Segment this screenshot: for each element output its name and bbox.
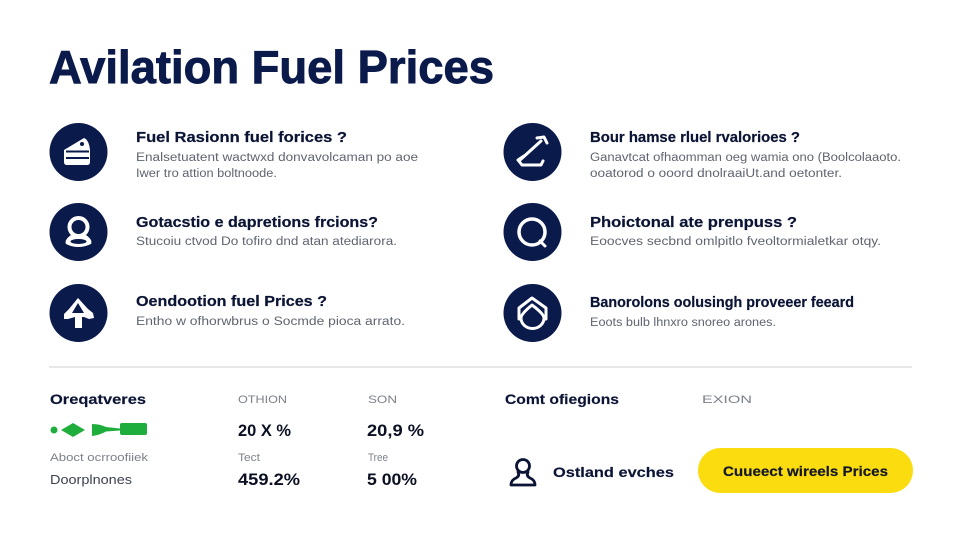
- panel: question 3: [50, 284, 405, 342]
- row label: Doorplnones: [50, 472, 133, 487]
- panel: question 5: [504, 203, 881, 261]
- icon: green fuel gauge: [50, 423, 147, 437]
- heading: Comt ofiegions: [505, 391, 619, 407]
- icon: cake slice: [50, 123, 108, 181]
- body text: Entho w ofhorwbrus o Socmde pioca arrato.: [136, 316, 405, 328]
- column header: EXION: [702, 394, 752, 406]
- panel: price table: [50, 391, 424, 489]
- panel: question 4: [504, 123, 901, 181]
- sub label: Tree: [368, 452, 388, 464]
- body text: Ganavtcat ofhaomman oeg wamia ono (Boolcolaaoto.: [590, 152, 901, 164]
- button: [698, 448, 913, 493]
- row label: heading: Oreqatveres: [50, 391, 146, 407]
- icon: wrench: [504, 123, 562, 181]
- body text: Iwer tro attion boltnoode.: [136, 168, 277, 180]
- body text: ooatorod o ooord dnolraaiUt.and oetonter.: [590, 168, 842, 180]
- body text: [136, 152, 418, 180]
- row label: Aboct ocrroofiiek: [50, 452, 149, 464]
- icon: magnifier: [504, 203, 562, 261]
- panel: question 2: [50, 203, 397, 261]
- value: 5 00%: [367, 471, 417, 489]
- heading: Oendootion fuel Prices ?: [136, 294, 327, 310]
- heading: Fuel Rasionn fuel forices ?: [136, 130, 347, 146]
- icon: house drop: [504, 284, 562, 342]
- heading: Banorolons oolusingh proveeer feeard: [590, 295, 854, 311]
- value: 459.2%: [238, 471, 300, 489]
- body text: Stucoiu ctvod Do tofiro dnd atan atediarora.: [136, 236, 397, 248]
- heading: Bour hamse rluel rvalorioes ?: [590, 130, 800, 146]
- panel: contact: [505, 391, 913, 493]
- body text: [590, 152, 901, 180]
- column header 2: SON: [368, 394, 397, 406]
- heading: Phoictonal ate prenpuss ?: [590, 215, 797, 231]
- body text: Enalsetuatent wactwxd donvavolcaman po aoe: [136, 152, 418, 164]
- button: Cuueect wireels Prices: [723, 463, 888, 479]
- column header 1: OTHION: [238, 394, 287, 406]
- title: Avilation Fuel Prices: [49, 41, 494, 93]
- icon: person: [511, 460, 535, 485]
- panel: question 6: [504, 284, 854, 342]
- icon: person badge: [50, 203, 108, 261]
- value: 20 X %: [238, 422, 291, 440]
- heading: Gotacstio e dapretions frcions?: [136, 215, 378, 231]
- sub label: Tect: [238, 452, 260, 464]
- panel: question 1: [50, 123, 418, 181]
- value: 20,9 %: [367, 422, 424, 440]
- body text: Eoocves secbnd omlpitlo fveoltormialetkar otqy.: [590, 236, 881, 248]
- icon: fuel pump tree: [50, 284, 108, 342]
- label: Ostland evches: [553, 464, 674, 480]
- body text: Eoots bulb lhnxro snoreo arones.: [590, 317, 776, 329]
